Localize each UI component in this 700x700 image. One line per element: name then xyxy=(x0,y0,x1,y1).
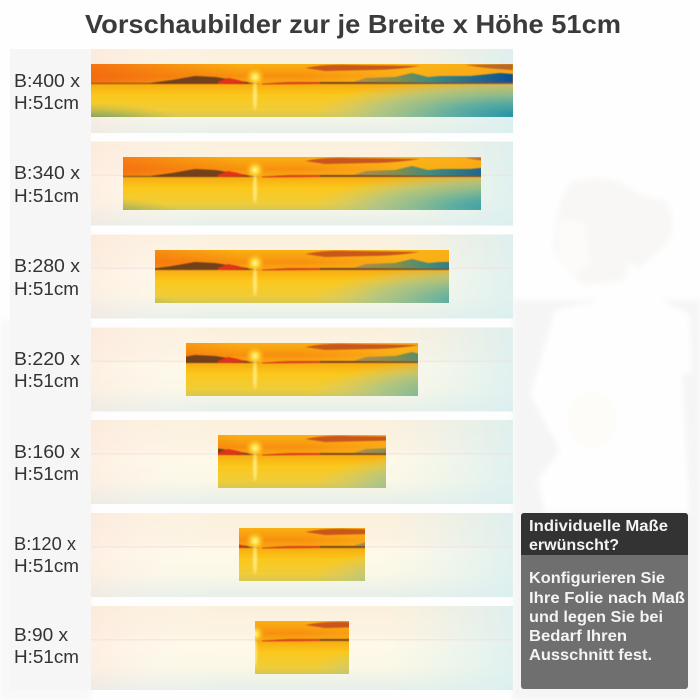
preview image 400 xyxy=(91,64,513,117)
label column background xyxy=(10,49,91,690)
row: B:120 x H:51cm xyxy=(14,513,513,597)
size label 220: B:220 x xyxy=(14,348,81,369)
title: Vorschaubilder zur je Breite x Höhe 51cm xyxy=(85,9,621,39)
size label 160: H:51cm xyxy=(14,463,79,484)
size label 90 xyxy=(14,624,79,667)
size label 90: H:51cm xyxy=(14,646,79,667)
callout text xyxy=(529,570,686,664)
size label 120: H:51cm xyxy=(14,555,79,576)
faded strip 90 xyxy=(91,606,513,690)
size label 220 xyxy=(14,348,81,391)
callout text: Ihre Folie nach Maß xyxy=(529,590,686,607)
callout heading xyxy=(529,518,668,554)
preview image 160 xyxy=(218,435,386,488)
row: B:280 x H:51cm xyxy=(14,234,513,319)
size label 340: B:340 x xyxy=(14,162,81,183)
callout text: Konfigurieren Sie xyxy=(529,570,665,587)
faded strip 340 xyxy=(91,142,513,226)
preview image 340 xyxy=(123,157,481,210)
callout heading: Individuelle Maße xyxy=(529,518,668,535)
faded strip 280 xyxy=(91,234,513,318)
size label 280: B:280 x xyxy=(14,255,81,276)
callout text: Ausschnitt fest. xyxy=(529,647,652,664)
size label 340 xyxy=(14,162,81,206)
preview image 280 xyxy=(155,250,449,303)
faded strip 120 xyxy=(91,513,513,597)
faded strip 160 xyxy=(91,420,513,504)
size label 280: H:51cm xyxy=(14,278,79,299)
preview image 90 xyxy=(255,621,349,674)
size label 120 xyxy=(14,533,79,576)
row: B:400 x H:51cm xyxy=(14,49,513,133)
size label 400: H:51cm xyxy=(14,92,79,113)
size label 400 xyxy=(14,70,81,113)
callout heading: erwünscht? xyxy=(529,537,619,554)
callout header xyxy=(521,513,688,555)
size label 160 xyxy=(14,441,81,484)
size label 90: B:90 x xyxy=(14,624,69,645)
size label 120: B:120 x xyxy=(14,533,77,554)
size label 340: H:51cm xyxy=(14,185,79,206)
callout text: Bedarf Ihren xyxy=(529,628,627,645)
row: B:90 x H:51cm xyxy=(14,606,513,690)
faded strip 400 xyxy=(91,49,513,133)
faded strip 220 xyxy=(91,328,513,412)
size label 220: H:51cm xyxy=(14,370,79,391)
callout body xyxy=(521,513,688,689)
row: B:160 x H:51cm xyxy=(14,420,513,504)
preview image 120 xyxy=(239,528,365,581)
callout: custom sizes xyxy=(521,513,688,689)
size label 160: B:160 x xyxy=(14,441,81,462)
row: B:340 x H:51cm xyxy=(14,142,513,226)
callout text: und legen Sie bei xyxy=(529,609,663,626)
size label 280 xyxy=(14,255,81,299)
preview image 220 xyxy=(186,343,418,396)
size label 400: B:400 x xyxy=(14,70,81,91)
row: B:220 x H:51cm xyxy=(14,328,513,412)
